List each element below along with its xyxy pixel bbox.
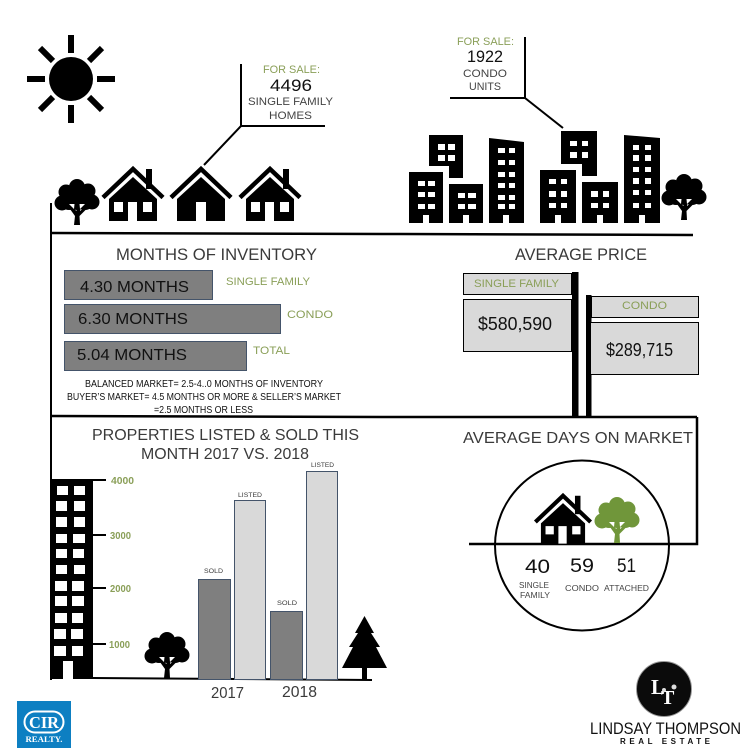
text block: market definitions: =2.5 MONTHS OR LESS [154, 405, 253, 416]
stat: attached days: 51 [617, 556, 636, 577]
label: year 2017: 2017 [211, 685, 244, 702]
heading: average price: AVERAGE PRICE [515, 245, 647, 264]
heading: average days on market: AVERAGE DAYS ON MARKET [463, 430, 693, 447]
label: year 2018: 2018 [282, 684, 317, 701]
circle [495, 460, 669, 630]
icon: tree in chart [144, 632, 190, 678]
text block: market definitions: BALANCED MARKET= 2.5-4..0 MONTHS OF INVENTORY [85, 379, 323, 390]
icon: house two [171, 169, 231, 221]
callout: single family homes for sale [204, 64, 334, 165]
axis labels: 1000 [109, 640, 130, 651]
callout: single family homes for sale: FOR SALE: [263, 64, 320, 76]
sign posts [572, 272, 592, 417]
axis labels: 3000 [110, 531, 131, 542]
icon: house three [240, 169, 300, 221]
sign: single family price: $580,590 [478, 314, 552, 334]
sign: single family price: SINGLE FAMILY [474, 278, 560, 290]
callout: single family homes for sale: HOMES [269, 110, 312, 122]
panel: average days on market [463, 430, 693, 630]
sign: condo price: $289,715 [606, 340, 673, 360]
logo: cir realty: CIR [29, 713, 60, 732]
axis labels: 4000 [111, 476, 134, 487]
heading: properties listed and sold: MONTH 2017 VS. 2018 [141, 446, 309, 463]
icon: pine tree [342, 616, 387, 679]
stat: attached days [604, 556, 649, 593]
icon: sun [27, 35, 115, 123]
callout: condo units for sale [450, 36, 563, 128]
bar: condo months [64, 304, 280, 334]
bar: 2017 sold [198, 569, 230, 680]
icon: condo buildings left cluster [409, 135, 524, 223]
logo: lindsay thompson real estate: T [661, 687, 675, 709]
stat: condo days: 59 [570, 556, 594, 577]
panel: months of inventory [64, 245, 341, 416]
stat: single family days [519, 557, 551, 600]
callout: condo units for sale: UNITS [469, 81, 501, 93]
text block: market definitions: BUYER’S MARKET= 4.5 MONTHS OR MORE & SELLER’S MARKET [67, 392, 341, 403]
callout: condo units for sale: FOR SALE: [457, 36, 514, 48]
bar: 2018 listed [306, 463, 338, 680]
bar: 2018 listed: LISTED [311, 463, 335, 469]
icon: house [535, 496, 591, 544]
label: single family: SINGLE FAMILY [226, 276, 311, 288]
logo: lindsay thompson real estate [590, 662, 741, 746]
panel: average price [464, 245, 698, 417]
callout: single family homes for sale: 4496 [270, 76, 312, 95]
icon: tree left of houses [54, 179, 100, 225]
stat: condo days [565, 556, 599, 593]
bar: 2018 sold: SOLD [277, 601, 298, 607]
heading: months of inventory: MONTHS OF INVENTORY [116, 245, 317, 264]
stat: single family days: FAMILY [520, 591, 551, 600]
sign: condo price: CONDO [622, 300, 667, 312]
chart axis ticks and baseline [93, 480, 372, 680]
axis labels: 2000 [110, 584, 131, 595]
text block: market definitions [67, 379, 341, 416]
icon: house one [103, 169, 163, 221]
bar: 2017 listed [234, 493, 266, 680]
sign: single family price [464, 274, 572, 352]
panel: properties listed and sold chart [51, 427, 387, 702]
logo: lindsay thompson real estate: REAL ESTATE [620, 737, 711, 746]
stat: single family days: SINGLE [519, 581, 549, 590]
stat: attached days: ATTACHED [604, 584, 649, 593]
icon: apartment tower axis [51, 479, 93, 679]
logo: cir realty [17, 701, 71, 748]
bar: condo months: 6.30 MONTHS [78, 311, 188, 328]
callout: condo units for sale: CONDO [463, 68, 507, 80]
label: condo: CONDO [287, 309, 333, 321]
icon: condo buildings right cluster [540, 131, 660, 223]
icon: green tree [594, 497, 640, 543]
callout: condo units for sale: 1922 [467, 47, 503, 66]
logo: lindsay thompson real estate: L [651, 675, 665, 699]
bar: total months: 5.04 MONTHS [77, 347, 187, 364]
stat: single family days: 40 [525, 557, 550, 578]
bar: 2018 sold [270, 601, 302, 680]
bar: total months [64, 342, 246, 370]
bar: 2017 sold: SOLD [204, 569, 224, 575]
bar: 2017 listed: LISTED [238, 493, 263, 499]
callout: single family homes for sale: SINGLE FAMILY [248, 96, 334, 108]
frame lines [51, 203, 697, 680]
bar: single family months [64, 270, 212, 300]
label: total: TOTAL [253, 345, 290, 357]
bar: single family months: 4.30 MONTHS [80, 279, 189, 296]
logo: cir realty: REALTY. [26, 735, 62, 744]
sign: condo price [590, 296, 698, 374]
heading: properties listed and sold [92, 427, 359, 463]
axis labels [109, 476, 134, 651]
icon: tree right of buildings [662, 174, 706, 220]
heading: properties listed and sold: PROPERTIES LISTED & SOLD THIS [92, 427, 359, 444]
stat: condo days: CONDO [565, 584, 599, 593]
